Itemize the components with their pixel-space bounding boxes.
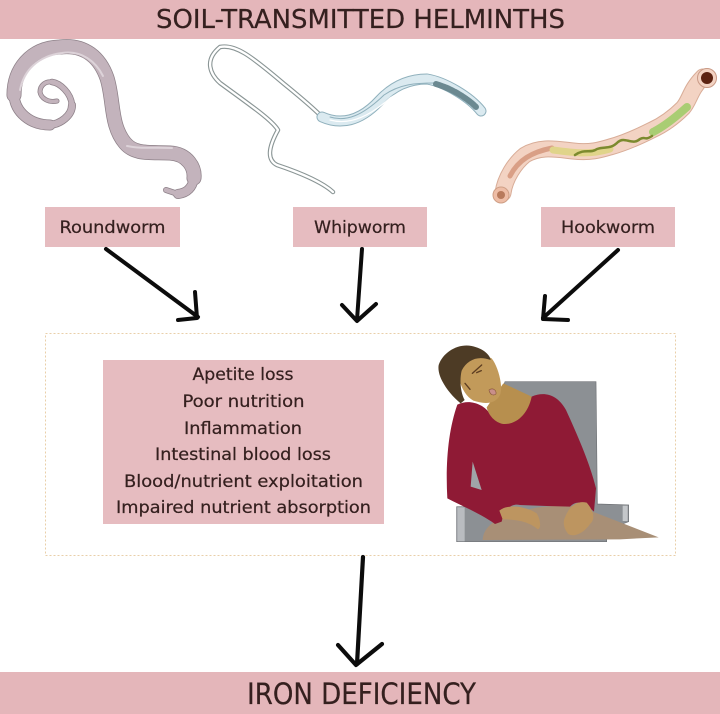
- symptom list: Inflammation: [184, 419, 302, 438]
- title banner: [0, 0, 720, 39]
- legs: [483, 506, 659, 540]
- face: [459, 356, 501, 403]
- label: Roundworm: Roundworm: [60, 218, 166, 238]
- symptom list: Poor nutrition: [182, 392, 304, 411]
- arrow: hookworm to symptoms: [543, 250, 618, 320]
- panel: effects: [46, 334, 676, 556]
- icon: hookworm: [493, 68, 716, 203]
- symptom list: Intestinal blood loss: [155, 445, 331, 464]
- icon: whipworm: [210, 47, 481, 192]
- symptom list: Impaired nutrient absorption: [116, 498, 371, 517]
- label: Whipworm: Whipworm: [314, 218, 406, 238]
- chair: [457, 382, 629, 542]
- outcome banner: [0, 672, 720, 714]
- symptom list: [103, 360, 384, 524]
- arrow: whipworm to symptoms: [342, 249, 376, 321]
- label: Hookworm: [541, 207, 675, 247]
- arrow: roundworm to symptoms: [106, 249, 198, 320]
- icon: roundworm: [14, 47, 194, 194]
- title banner: SOIL-TRANSMITTED HELMINTHS: [156, 5, 565, 35]
- symptom list: Blood/nutrient exploitation: [124, 472, 363, 491]
- label: Whipworm: [293, 207, 427, 247]
- hair: [438, 346, 491, 403]
- label: Roundworm: [45, 207, 180, 247]
- hands: [499, 502, 593, 535]
- sweater: [447, 394, 596, 524]
- symptom list: Apetite loss: [192, 365, 294, 384]
- facial features: [465, 365, 496, 395]
- label: Hookworm: Hookworm: [561, 218, 655, 238]
- neck: [487, 383, 532, 424]
- illustration: tired seated woman: [438, 346, 659, 542]
- arrow: effects to iron deficiency: [338, 557, 382, 665]
- outcome banner: IRON DEFICIENCY: [247, 677, 477, 711]
